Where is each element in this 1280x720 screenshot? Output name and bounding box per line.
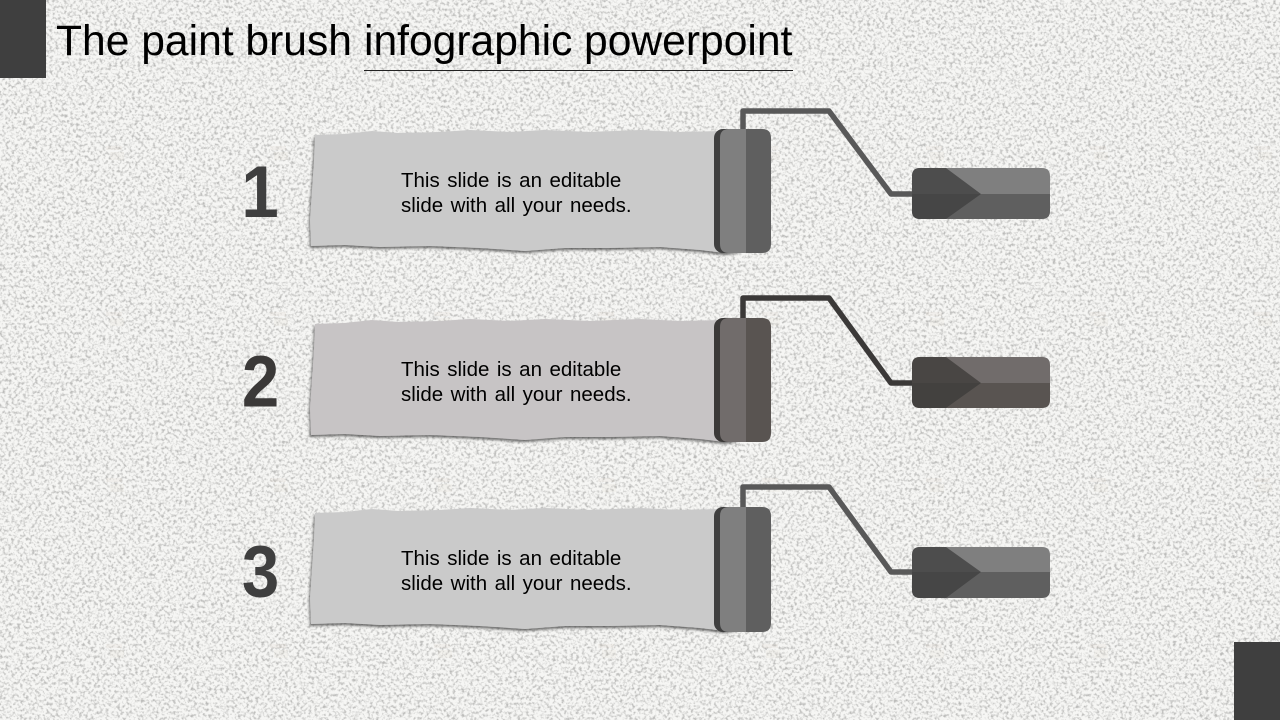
roller grip 2 (912, 357, 1050, 408)
paint roller head 3 (714, 507, 771, 632)
torn paper text strip 3 (310, 508, 740, 631)
panel: step 2 (242, 298, 1050, 442)
body text 1: slide with all your needs. (401, 194, 632, 217)
roller grip 1 (912, 168, 1050, 219)
title (56, 17, 793, 70)
panel: step 3 (242, 487, 1050, 632)
torn paper text strip 2 (310, 319, 740, 442)
body text 2: This slide is an editable (401, 358, 621, 381)
roller wire handle 1 (743, 111, 912, 194)
paint roller head 1 (714, 129, 771, 253)
body text 1: This slide is an editable (401, 169, 621, 192)
corner block: top left (0, 0, 46, 78)
corner block: bottom right (1234, 642, 1280, 720)
roller grip 3 (912, 547, 1050, 598)
body text 3: This slide is an editable (401, 547, 621, 570)
number 3: 3 (242, 531, 279, 612)
body text 2: slide with all your needs. (401, 383, 632, 406)
number 2: 2 (242, 341, 279, 422)
paint roller head 2 (714, 318, 771, 442)
body text 3: slide with all your needs. (401, 572, 632, 595)
number 1: 1 (241, 151, 279, 233)
title: infographic (364, 17, 572, 65)
title: powerpoint (584, 17, 793, 65)
title: The paint brush (56, 17, 352, 65)
roller wire handle 3 (743, 487, 912, 572)
torn paper text strip 1 (310, 130, 740, 253)
roller wire handle 2 (743, 298, 912, 383)
panel: step 1 (241, 111, 1050, 253)
